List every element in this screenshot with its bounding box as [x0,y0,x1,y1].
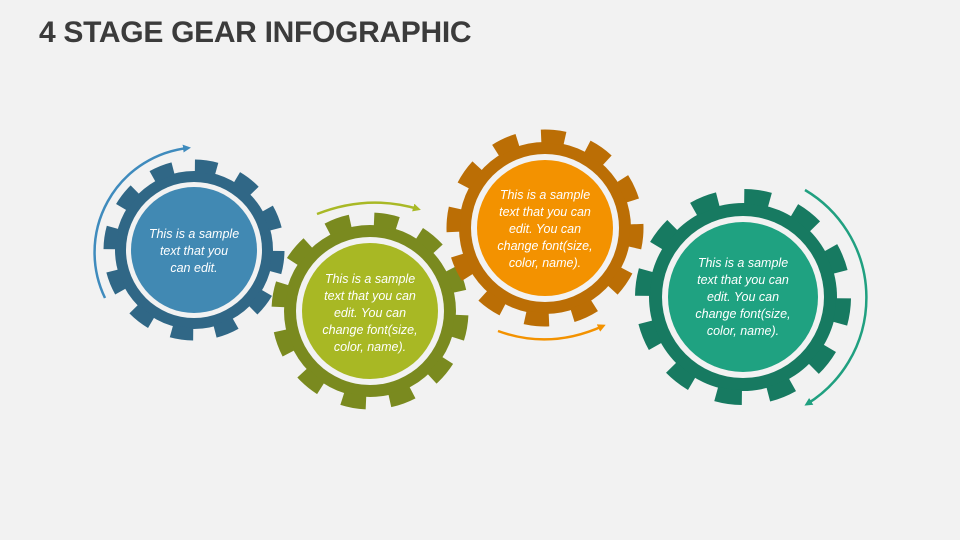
gear 4: teal [629,183,857,411]
gear 2: olive: This is a sample [325,272,415,286]
arrow: olive curved [317,203,418,214]
arrow: teal curved [805,190,866,404]
arrow: orange curved [498,326,603,339]
gear 4: teal: edit. You can [707,290,779,304]
gear 3: orange: change font(size, [497,239,593,253]
gear 3: orange [446,129,644,327]
gear 4: teal: color, name). [707,324,779,338]
gear 2: olive: edit. You can [334,306,406,320]
gear 3: orange: edit. You can [509,222,581,236]
gear 2: olive: color, name). [334,340,406,354]
title: 4 STAGE GEAR INFOGRAPHIC [39,16,471,49]
arrow: blue curved [95,148,188,298]
gear 1: blue [99,155,289,345]
gear 1: blue: This is a sample [149,227,239,241]
gear 3: orange: color, name). [509,256,581,270]
gear 2: olive [264,205,476,417]
gear 3: orange: This is a sample [500,188,590,202]
gear 1: blue: text that you [160,244,228,258]
gear 3: orange: text that you can [499,205,591,219]
gear 2: olive: text that you can [324,289,416,303]
gear 2: olive: change font(size, [322,323,418,337]
gear 4: teal: text that you can [697,273,789,287]
gear 4: teal: This is a sample [698,256,788,270]
gear 1: blue: can edit. [170,261,218,275]
gear 4: teal: change font(size, [695,307,791,321]
